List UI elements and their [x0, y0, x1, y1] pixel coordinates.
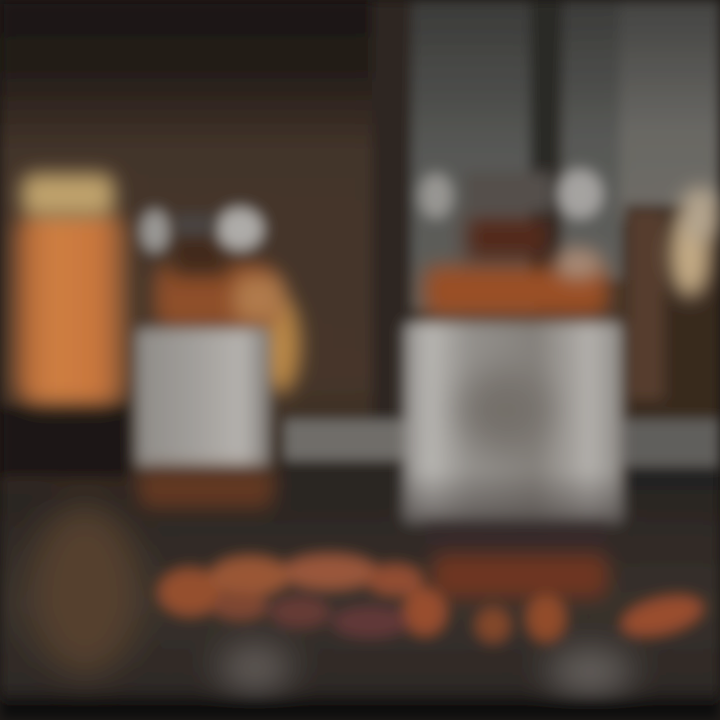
base [432, 554, 608, 598]
background right: window glow and dark furniture [625, 187, 720, 415]
capsules under front bottle [475, 594, 566, 643]
label bottom fade [404, 470, 622, 524]
background wall [0, 0, 720, 500]
capsule on the right [617, 588, 707, 644]
label text smudge [460, 370, 550, 450]
dark lower band [424, 522, 608, 556]
bottle: middle bottle [136, 207, 300, 508]
bottle: front large bottle [404, 169, 622, 598]
shoulder highlight [260, 297, 300, 393]
capsules in front of bottles [158, 554, 707, 644]
amber glass shoulder [424, 266, 608, 316]
bottle cap [22, 174, 114, 216]
base [138, 470, 274, 508]
cap [464, 172, 552, 212]
label [136, 328, 270, 468]
neck [466, 216, 550, 260]
bottle body [16, 214, 128, 404]
table surface [0, 490, 720, 720]
amber glass [155, 264, 275, 328]
neck [172, 232, 228, 276]
counter ledge [280, 420, 720, 504]
bottle: left orange bottle [0, 174, 130, 477]
label [404, 322, 622, 522]
cap highlights [140, 209, 170, 253]
capsule pile [158, 554, 447, 638]
bottle stand shadow [0, 405, 130, 477]
